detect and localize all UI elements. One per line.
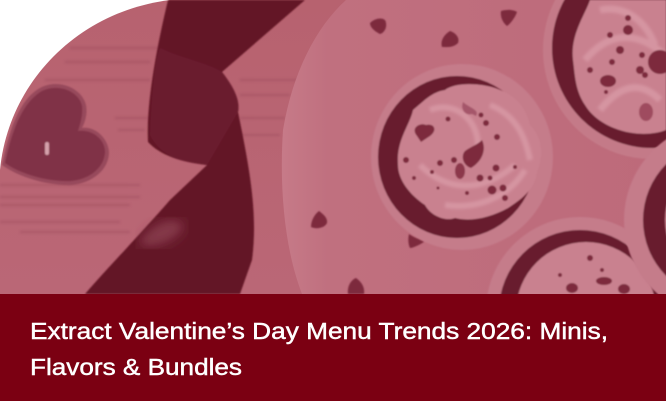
table background (0, 0, 346, 294)
icon: small plate hearts (311, 10, 517, 294)
cupcake top right (543, 0, 666, 159)
cupcake bottom (488, 217, 658, 294)
ribbon (85, 0, 305, 294)
title banner (0, 294, 666, 401)
hero photo: cupcakes on plate with ribbon and heart candle (0, 0, 666, 294)
heading: Extract Valentine’s Day Menu Trends 2026: Minis, (30, 318, 608, 344)
cupcake right (624, 138, 666, 294)
plate (282, 0, 615, 294)
heading: Flavors & Bundles (30, 354, 242, 380)
cupcake center (371, 64, 553, 250)
heading (30, 318, 608, 380)
icon: heart candle (2, 84, 109, 185)
